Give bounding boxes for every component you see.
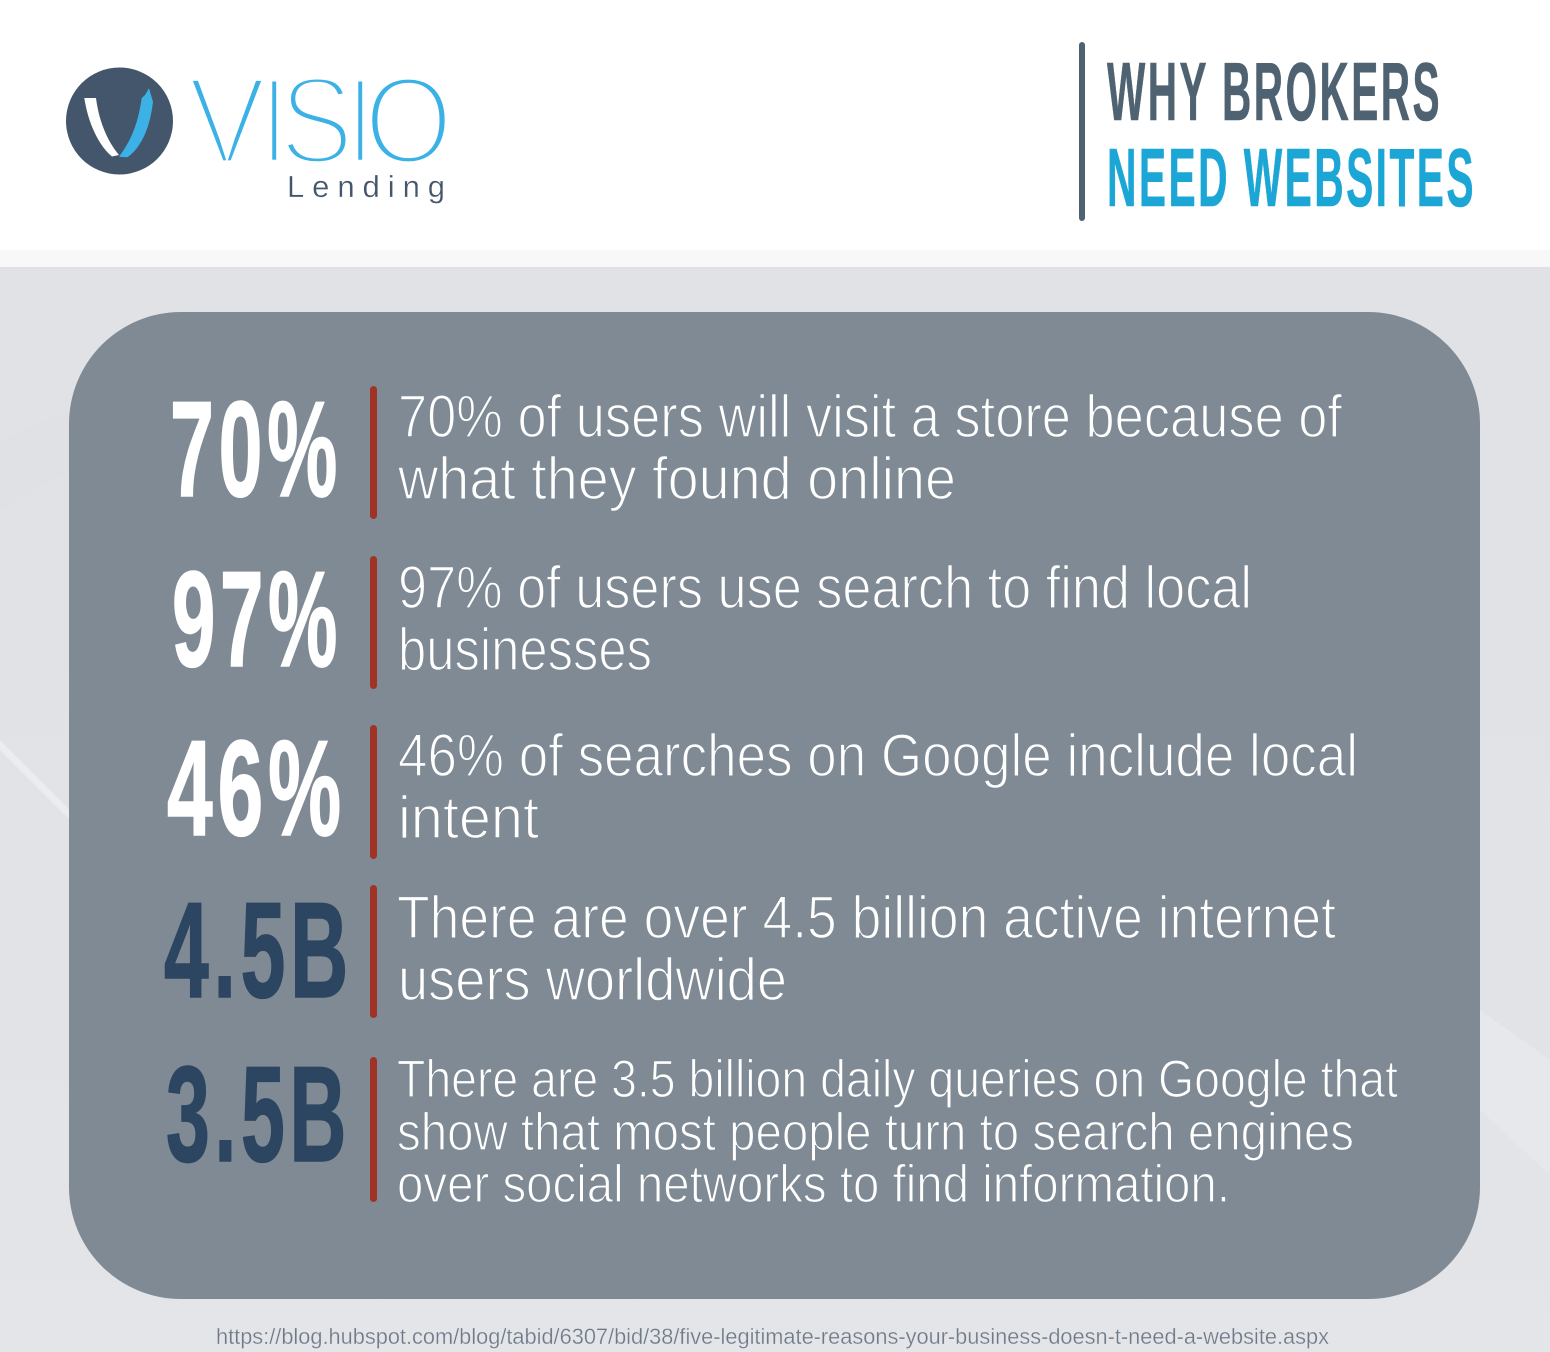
logo wordmark VISIO: I	[257, 52, 291, 190]
logo: Visio Lending	[66, 52, 453, 204]
logo wordmark VISIO: V	[188, 52, 266, 190]
stat row: 70%	[170, 373, 1342, 525]
stat row: 97%: 97% of users use search to find local	[398, 554, 1252, 621]
title block	[1079, 42, 1476, 224]
stat row: 4.5B: There are over 4.5 billion active internet	[397, 884, 1336, 951]
stat row: 70%: 70%	[170, 373, 342, 525]
stat row: 97%	[172, 543, 1252, 695]
logo wordmark VISIO: O	[364, 52, 453, 190]
stat row: 70%: 70% of users will visit a store because of	[398, 383, 1342, 450]
stat row: 3.5B: over social networks to find information.	[397, 1155, 1230, 1214]
stat row: 3.5B: show that most people turn to search engines	[397, 1103, 1354, 1162]
logo subtitle Lending: Lending	[287, 169, 445, 204]
logo mark	[66, 68, 173, 174]
stat row: 97%: businesses	[398, 616, 652, 683]
stat row: 97%: 97%	[172, 543, 342, 695]
stat row: 3.5B	[166, 1038, 1398, 1214]
panel: statistics	[69, 312, 1480, 1299]
logo wordmark VISIO	[188, 52, 453, 190]
logo wordmark VISIO: I	[343, 52, 377, 190]
logo wordmark VISIO: S	[280, 52, 354, 190]
source URL: https://blog.hubspot.com/blog/tabid/6307/bid/38/five-legitimate-reasons-your-business-doesn-t-need-a-website.aspx	[216, 1324, 1329, 1349]
stat row: 4.5B: users worldwide	[398, 946, 787, 1013]
stat row: 46%: intent	[398, 784, 539, 851]
stat row: 3.5B: 3.5B	[166, 1038, 351, 1190]
stat row: 46%	[167, 712, 1358, 864]
stat row: 70%: what they found online	[397, 445, 956, 512]
stat row: 4.5B	[164, 874, 1336, 1026]
stat row: 3.5B: There are 3.5 billion daily queries on Google that	[397, 1050, 1398, 1109]
stat row: 46%: 46%	[167, 712, 346, 864]
stat row: 46%: 46% of searches on Google include local	[398, 722, 1358, 789]
stat row: 4.5B: 4.5B	[164, 874, 353, 1026]
